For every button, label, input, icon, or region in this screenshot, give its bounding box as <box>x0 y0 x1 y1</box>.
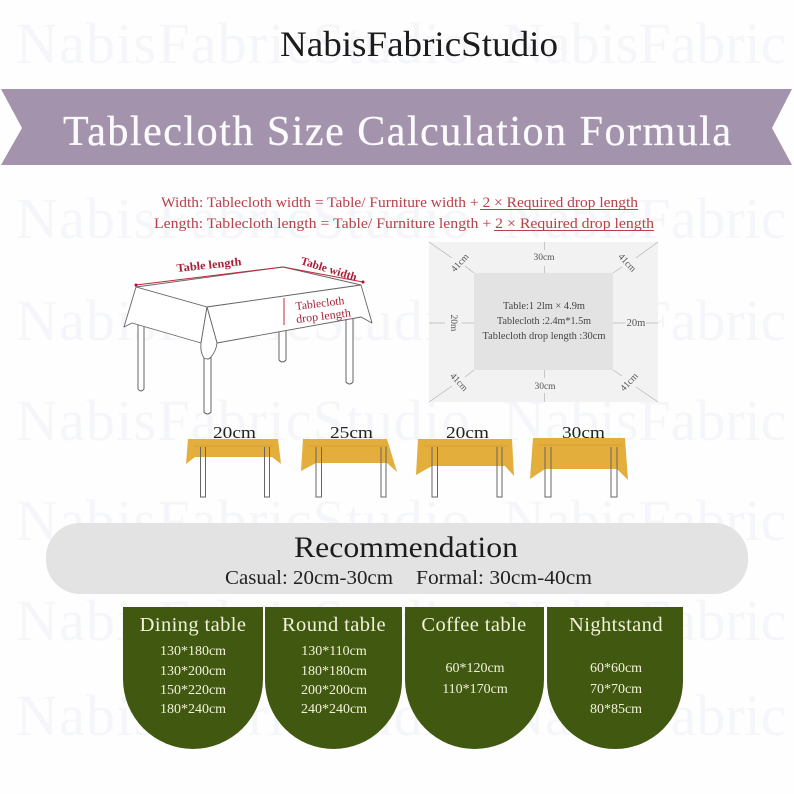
title banner: Tablecloth Size Calculation Formula <box>63 109 731 155</box>
text: NabisFabricStudio <box>16 186 471 251</box>
panel: round table: Round table <box>282 614 386 636</box>
drop length example: 25cm <box>301 423 397 497</box>
text: NabisFabricStudio <box>16 588 471 653</box>
panel: dining table: 150*220cm <box>160 683 226 698</box>
panel: nightstand: Nightstand <box>569 614 663 636</box>
label: tablecloth drop length <box>294 294 352 326</box>
tablecloth size plan: 41cm <box>447 372 470 394</box>
title banner <box>1 89 792 165</box>
label: tablecloth drop length: Tablecloth <box>295 295 345 313</box>
label: table width: Table width <box>299 255 359 284</box>
drop length example: 30cm: 30cm <box>562 423 605 442</box>
text: NabisFabricStudio <box>16 11 471 76</box>
tablecloth outline <box>124 267 372 359</box>
drop length marker <box>283 298 285 325</box>
panel: dining table: 180*240cm <box>160 702 226 717</box>
drop length example: 20cm <box>416 423 514 497</box>
recommendation heading: Recommendation <box>294 531 518 564</box>
panel: round table: 240*240cm <box>301 702 367 717</box>
label: table length: Table length <box>176 256 243 275</box>
plan dimensions: Tablecloth drop length :30cm <box>482 331 606 342</box>
tablecloth size plan: 41cm <box>450 252 472 274</box>
panel: dining table: 130*180cm <box>160 644 226 659</box>
label: tablecloth drop length: drop length <box>295 307 352 326</box>
formula text <box>154 195 655 232</box>
panel: coffee table <box>405 607 544 749</box>
table diagram <box>124 255 372 414</box>
plan dimensions: Tablecloth :2.4m*1.5m <box>497 316 591 327</box>
tablecloth size plan: 41cm <box>619 371 641 394</box>
formula text: Width: Tablecloth width = Table/ Furniture width + 2 × Required drop length <box>161 195 639 211</box>
tablecloth size plan <box>429 242 658 402</box>
table length arrow <box>136 267 283 285</box>
drop length example: 20cm <box>186 423 281 497</box>
panel: nightstand: 60*60cm <box>590 661 642 676</box>
text: NabisFabric <box>503 388 786 453</box>
table legs <box>138 318 353 414</box>
recommendation pill <box>46 523 748 594</box>
formal range: Formal: 30cm-40cm <box>416 567 592 589</box>
text: NabisFabricStudio <box>16 488 471 553</box>
text: NabisFabric <box>503 288 786 353</box>
brand name heading: NabisFabricStudio <box>280 24 558 64</box>
tablecloth size plan: 41cm <box>616 252 638 275</box>
panel: round table: 130*110cm <box>301 644 367 659</box>
text: NabisFabricStudio <box>16 388 471 453</box>
drop length example: 25cm: 25cm <box>330 423 373 442</box>
tablecloth size plan: 20m <box>448 315 458 332</box>
formula text: Length: Tablecloth length = Table/ Furniture length + 2 × Required drop length <box>154 216 655 232</box>
text: NabisFabric <box>503 488 786 553</box>
drop length example: 20cm: 20cm <box>446 423 489 442</box>
text: NabisFabricStudio <box>16 288 471 353</box>
panel: coffee table: Coffee table <box>421 614 527 636</box>
tablecloth size plan: 30cm <box>534 382 556 392</box>
drop length example: 20cm: 20cm <box>213 423 256 442</box>
drop length example: 30cm <box>530 423 628 497</box>
plan dimensions: Table:1 2lm × 4.9m <box>503 301 585 312</box>
text: NabisFabric <box>503 186 786 251</box>
panel: round table <box>265 607 402 749</box>
panel: coffee table: 60*120cm <box>445 661 505 676</box>
panel: round table: 180*180cm <box>301 664 367 679</box>
panel: nightstand: 80*85cm <box>590 702 642 717</box>
text: NabisFabric <box>503 588 786 653</box>
text: NabisFabricStudio <box>16 683 471 748</box>
panel: nightstand <box>547 607 683 749</box>
panel: round table: 200*200cm <box>301 683 367 698</box>
panel: dining table <box>123 607 263 749</box>
tablecloth size plan: 30cm <box>533 253 555 263</box>
casual range: Casual: 20cm-30cm <box>225 567 393 589</box>
panel: coffee table: 110*170cm <box>442 682 508 697</box>
text: NabisFabric <box>503 683 786 748</box>
text: NabisFabric <box>503 11 786 76</box>
table width arrow <box>283 267 363 282</box>
panel: dining table: Dining table <box>140 614 246 636</box>
panel: nightstand: 70*70cm <box>590 682 642 697</box>
tablecloth size plan: 20m <box>627 318 645 329</box>
panel: dining table: 130*200cm <box>160 664 226 679</box>
plan dimensions <box>482 301 606 342</box>
